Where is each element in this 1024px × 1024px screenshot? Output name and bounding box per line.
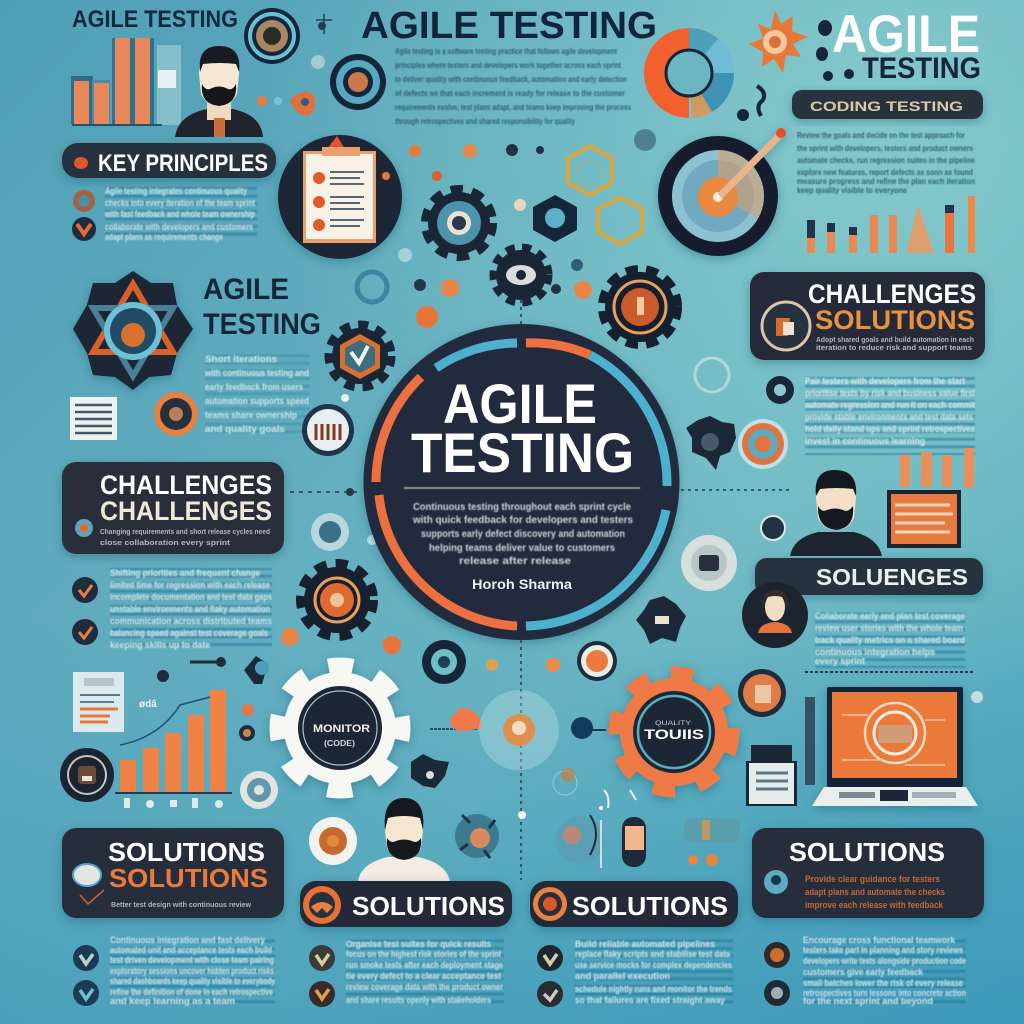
text block: top right: automate checks, run regression suites in the pipeline <box>797 156 975 165</box>
text block: top centre <box>395 47 631 126</box>
text block: top centre: of defects so that each increment is ready for release to the customer <box>395 89 625 98</box>
laptop <box>812 687 978 806</box>
heading: agile testing left: TESTING <box>203 308 321 341</box>
icons: check bullets bottom <box>73 942 790 1007</box>
icon: clipboard <box>278 135 402 259</box>
text block: solutions 1: Continuous integration and fast delivery <box>110 935 265 945</box>
central circle <box>364 324 680 640</box>
icon: gear centre <box>494 248 548 302</box>
text block: right middle: provide stable environments and test data sets <box>805 412 973 422</box>
text block: solvenges: continuous integration helps <box>815 647 935 657</box>
icon: gear with check <box>329 325 391 387</box>
text block: challenges: limited time for regression with each release <box>110 580 270 590</box>
text block: solutions 4: customers give early feedback <box>803 967 924 977</box>
icon: gear orange centre <box>301 564 373 636</box>
icon: orange medal <box>738 669 786 717</box>
pill: coding testing: CODING TESTING <box>810 98 963 114</box>
text block: top centre: requirements evolve, test plans adapt, and teams keep improving the process <box>395 103 631 112</box>
panel: key principles: KEY PRINCIPLES <box>98 150 268 177</box>
decorative dark flower <box>636 596 686 644</box>
text block: agile testing left: Short iterations <box>205 354 277 364</box>
icon: top-left ring <box>244 8 300 64</box>
panel: solutions right: Provide clear guidance for testers <box>805 874 940 884</box>
bar chart: top right <box>807 196 975 253</box>
text block: top right: keep quality visible to everyone <box>797 186 907 195</box>
text block: top right: the sprint with developers, testers and product owners <box>797 144 973 153</box>
panel: challenges left: close collaboration every sprint <box>100 538 231 547</box>
small dark icons: top right <box>737 20 854 121</box>
text block: solutions 4: developers write tests alongside production code <box>803 956 966 966</box>
text block: solutions 1: exploratory sessions uncover hidden product risks <box>110 966 274 976</box>
text block: solutions 3: use service mocks for complex dependencies <box>575 960 732 970</box>
text block: solutions 2: run smoke tests after each deployment stage <box>346 960 503 970</box>
icon: top centre ring <box>330 54 386 110</box>
text block: top right: explore new features, report defects as soon as found <box>797 168 973 177</box>
panel: solutions right: adapt plans and automate the checks <box>805 887 945 897</box>
text block: solutions 4: small batches lower the risk of every release <box>803 978 963 988</box>
white gear: (CODE) <box>324 739 355 748</box>
icon: target with pencil <box>658 128 786 256</box>
text block: right middle: hold daily stand ups and sprint retrospectives <box>805 424 975 434</box>
icon: gear with orange ring <box>603 270 677 344</box>
text block: solutions 1 <box>110 935 275 1006</box>
text block: challenges: keeping skills up to date <box>110 640 210 650</box>
icon: star badge <box>73 271 193 390</box>
text block: solutions 4: Encourage cross functional teamwork <box>803 935 956 945</box>
heading: top right: AGILE <box>832 5 980 64</box>
text block: solutions 1: and keep learning as a team <box>110 996 235 1006</box>
bar chart: bottom left <box>115 690 232 808</box>
text block: solutions 4: retrospectives turn lessons into concrete action <box>803 988 966 998</box>
ring arcs <box>376 343 667 626</box>
icon: document <box>73 672 124 732</box>
text block: key principles: collaborate with developers and customers <box>105 222 253 232</box>
pie chart <box>644 28 734 118</box>
panel: key principles <box>62 143 276 178</box>
text block: agile testing left: early feedback from users <box>205 382 303 392</box>
text block: key principles: Agile testing integrates continuous quality <box>105 186 247 196</box>
centre description: Continuous testing throughout each sprint cycle <box>413 501 631 513</box>
panel: challenges solutions right <box>750 272 985 360</box>
author: Horoh Sharma <box>472 576 572 592</box>
text block: right middle: automate regression and run it on each commit <box>805 400 975 410</box>
text block: key principles: checks into every iteration of the team sprint <box>105 198 255 208</box>
white gear: MONITOR <box>313 723 370 735</box>
panel: challenges left: CHALLENGES <box>100 496 272 526</box>
icon: swirl bullet <box>73 190 95 212</box>
icon: woman portrait <box>742 582 808 648</box>
pill: solvenges: SOLUENGES <box>816 564 968 590</box>
text block: solvenges: Collaborate early and plan test coverage <box>815 611 965 621</box>
text block: top centre: Agile testing is a software testing practice that follows agile development <box>395 47 617 56</box>
orange gear: TOUIIS <box>644 726 704 742</box>
panel: solutions left: Better test design with continuous review <box>111 900 251 909</box>
centre description: helping teams deliver value to customers <box>429 542 615 554</box>
panel: challenges left: Changing requirements and short release cycles need <box>100 527 270 536</box>
centre description <box>404 488 640 567</box>
heading: agile testing left <box>203 273 321 341</box>
text block: top centre: through retrospectives and shared responsibility for quality <box>395 117 575 126</box>
icon: dark hexagon <box>533 195 577 242</box>
centre title: TESTING <box>411 421 634 484</box>
bar chart: top left <box>71 38 181 126</box>
text block: solutions 4: testers take part in planning and story reviews <box>803 945 963 955</box>
text block: key principles <box>104 186 257 242</box>
text block: challenges <box>110 568 272 650</box>
text block: challenges: communication across distributed teams <box>110 616 272 626</box>
orange gear <box>616 674 732 790</box>
icon: paper note <box>70 397 117 440</box>
text block: solvenges: track quality metrics on a shared board <box>815 635 965 645</box>
text block: challenges: incomplete documentation and test data gaps <box>110 592 272 602</box>
panel: challenges solutions right: SOLUTIONS <box>815 305 975 335</box>
pill: solutions 1 <box>300 881 512 927</box>
centre description: with quick feedback for developers and testers <box>412 514 633 526</box>
text block: solutions 4: for the next sprint and beyond <box>803 996 933 1006</box>
text block: top right: measure progress and refine the plan each iteration <box>797 177 975 186</box>
pill: solutions 2: SOLUTIONS <box>572 891 728 921</box>
text block: right middle <box>805 375 975 455</box>
text block: solutions 2 <box>346 938 504 1006</box>
heading: top right: TESTING <box>862 52 981 85</box>
pill: solvenges <box>755 558 983 595</box>
translucent bubble hub <box>411 690 606 788</box>
bar chart: bottom left: ødâ <box>139 699 157 710</box>
text block: solutions 3: Build reliable automated pipelines <box>575 939 715 949</box>
text block: agile testing left: with continuous testing and <box>204 368 309 378</box>
small icons: middle lower <box>518 672 983 868</box>
text block: right middle: invest in continuous learning <box>805 436 925 446</box>
top-left heading: AGILE TESTING <box>72 6 238 33</box>
panel: challenges solutions right: iteration to reduce risk and support teams <box>816 343 972 352</box>
panel: challenges left: CHALLENGES <box>100 470 272 500</box>
icon: gold hexagons <box>568 146 642 244</box>
text block: solutions 4 <box>803 935 966 1006</box>
text block: solvenges <box>815 610 965 668</box>
icon: gear left of centre <box>426 190 492 256</box>
connector dots: left of centre <box>290 394 377 551</box>
panel: solutions left: SOLUTIONS <box>109 863 268 893</box>
text block: solutions 3: so that failures are fixed straight away <box>575 995 725 1005</box>
text block: challenges: unstable environments and flaky automation <box>110 604 270 614</box>
text block: key principles: adapt plans as requirements change <box>105 232 223 242</box>
text block: solutions 3: replace flaky scripts and stabilise test data <box>575 949 731 959</box>
panel: solutions left <box>62 828 284 918</box>
text block: agile testing left: automation supports speed <box>205 396 309 406</box>
centre description: release after release <box>459 555 571 567</box>
text block: solutions 1: shared dashboards keep quality visible to everybody <box>110 976 275 986</box>
panel: solutions left: SOLUTIONS <box>108 837 265 867</box>
text block: solutions 3 <box>575 938 733 1006</box>
text block: solutions 3: and parallel execution <box>575 971 670 981</box>
scattered small icons: upper centre <box>357 129 656 328</box>
main title: top centre: AGILE TESTING <box>361 5 657 47</box>
icons: around bottom person <box>309 814 499 865</box>
pill: coding testing <box>792 90 983 119</box>
white gear <box>279 667 401 789</box>
text block: solutions 2: review coverage data with the product owner <box>346 982 503 992</box>
text block: solutions 1: automated unit and acceptance tests each build <box>110 945 272 955</box>
text block: right middle: Pair testers with developers from the start <box>805 376 965 386</box>
centre description: supports early defect discovery and automation <box>421 528 625 540</box>
icon: check bullet <box>72 217 96 241</box>
pill: solutions 1: SOLUTIONS <box>352 891 505 921</box>
pill: solutions 2 <box>530 881 738 927</box>
text block: agile testing left: teams share ownership <box>205 410 297 420</box>
text block: solutions 2: focus on the highest risk stories of the sprint <box>346 949 501 959</box>
person: top left <box>175 46 263 137</box>
icon: check bullets left <box>72 577 98 645</box>
icon: people ring <box>302 404 354 456</box>
text block: challenges: Shifting priorities and frequent change <box>110 568 260 578</box>
text block: key principles: with fast feedback and whole team ownership <box>104 209 255 219</box>
text block: top centre: to deliver quality with continuous feedback, automation and early detection <box>395 75 627 84</box>
text block: solutions 1: test driven development with close team pairing <box>110 955 274 965</box>
text block: top right <box>797 131 975 195</box>
icon: checklist card <box>746 745 797 806</box>
icon: dark ring chart <box>60 748 114 802</box>
panel: solutions right: SOLUTIONS <box>789 837 945 867</box>
centre axis connectors <box>521 300 790 880</box>
small icons: between right panel and centre <box>681 358 794 591</box>
panel: solutions right <box>752 828 984 918</box>
text block: solutions 2: and share results openly with stakeholders <box>346 995 491 1005</box>
icon: orange ring <box>154 392 198 436</box>
text block: solutions 1: refine the definition of done in each retrospective <box>110 987 273 997</box>
centre title <box>411 372 634 484</box>
text block: solvenges: every sprint <box>815 656 865 666</box>
icon: sun burst <box>749 10 808 73</box>
panel: challenges solutions right: Adopt shared goals and build automation in each <box>816 335 974 344</box>
text block: solutions 2: tie every defect to a clear acceptance test <box>346 971 501 981</box>
text block: solvenges: review user stories with the whole team <box>815 623 963 633</box>
text block: solutions 2: Organise test suites for quick results <box>346 939 491 949</box>
heading: top right <box>832 5 981 85</box>
text block: right middle: prioritise tests by risk and business value first <box>805 388 975 398</box>
heading: agile testing left: AGILE <box>203 273 289 306</box>
bar chart and screen: right <box>887 448 974 548</box>
centre title: AGILE <box>443 372 597 435</box>
orange gear: QUALITY <box>655 721 691 727</box>
panel: solutions right: improve each release with feedback <box>805 900 944 910</box>
person: right <box>790 470 882 556</box>
panel: challenges solutions right: CHALLENGES <box>808 279 976 309</box>
small icons: below centre <box>157 628 617 741</box>
panel: challenges left <box>62 462 284 554</box>
text block: agile testing left: and quality goals <box>205 424 285 434</box>
person: bottom <box>358 798 450 881</box>
text block: agile testing left <box>204 352 310 438</box>
small orange icons: upper left <box>257 14 332 116</box>
text block: solutions 3: schedule nightly runs and monitor the trends <box>575 984 732 994</box>
text block: challenges: balancing speed against test coverage goals <box>110 628 268 638</box>
text block: top centre: principles where testers and developers work together across each sprint <box>395 61 621 70</box>
text block: top right: Review the goals and decide on the test approach for <box>797 131 965 140</box>
icon: pale badge <box>240 771 278 809</box>
